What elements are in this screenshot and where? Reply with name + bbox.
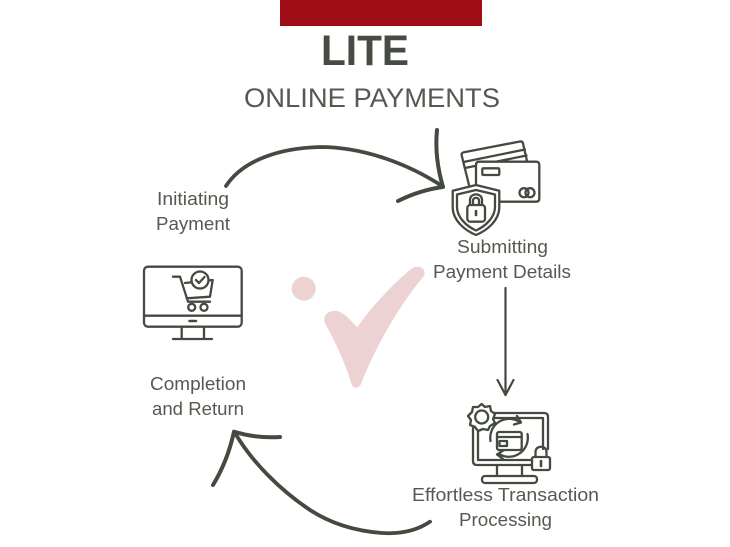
lock — [532, 457, 550, 470]
icon: monitor with transaction processing — [468, 404, 550, 483]
subtitle: ONLINE PAYMENTS — [244, 83, 500, 113]
label: submitting payment details — [433, 237, 571, 282]
back card — [462, 141, 527, 185]
arrow: submitting to processing — [498, 288, 514, 395]
gear — [468, 404, 495, 431]
circular arrows — [490, 419, 519, 441]
label: submitting payment details: Submitting — [457, 237, 548, 257]
label: completion and return: Completion — [150, 374, 246, 394]
icon: credit cards with security shield — [453, 141, 539, 235]
label: completion and return — [150, 374, 246, 419]
arrow: initiating to submitting — [226, 130, 443, 201]
label: submitting payment details: Payment Details — [433, 262, 571, 282]
label: completion and return: and Return — [152, 399, 244, 419]
label: initiating payment — [156, 189, 230, 234]
watermark check logo — [292, 267, 425, 388]
card — [497, 432, 522, 450]
title: LITE — [321, 27, 409, 75]
padlock — [467, 205, 485, 222]
icon: monitor with shopping cart — [144, 267, 242, 339]
label: effortless transaction processing — [412, 485, 599, 530]
cart — [173, 277, 213, 302]
arrow: processing to completion — [213, 432, 430, 533]
label: initiating payment: Initiating — [157, 189, 229, 209]
top red bar — [280, 0, 482, 26]
label: initiating payment: Payment — [156, 214, 230, 234]
label: effortless transaction processing: Processing — [459, 510, 552, 530]
label: effortless transaction processing: Effortless Transaction — [412, 485, 599, 505]
front card — [476, 162, 539, 202]
shield — [453, 185, 499, 235]
